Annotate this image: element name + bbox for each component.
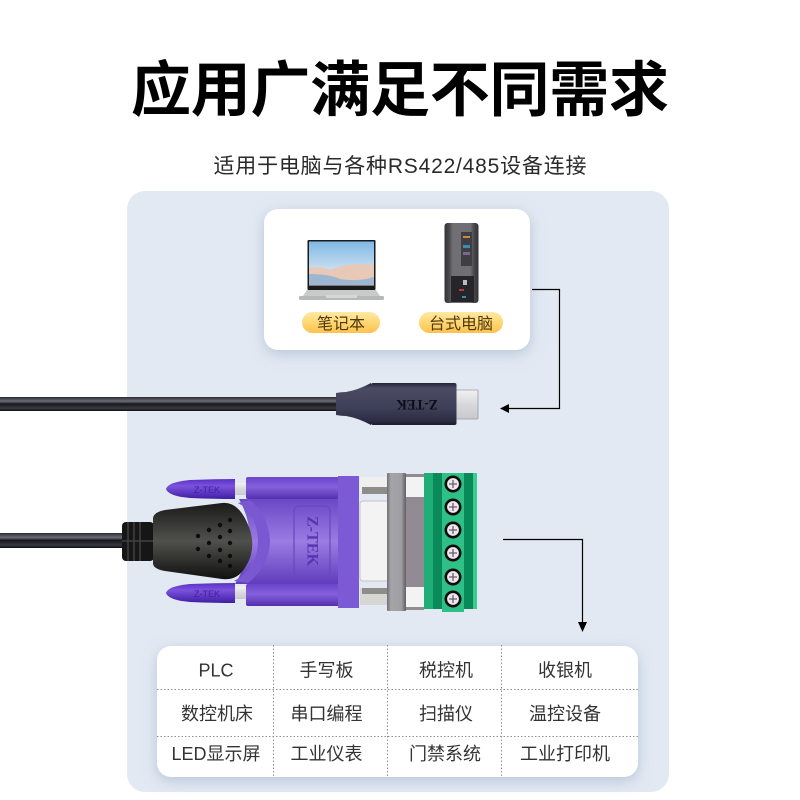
- row 2: 串口编程: [290, 704, 362, 724]
- label pill: laptop: [302, 312, 380, 333]
- arrow: computers to USB-C: [500, 290, 560, 413]
- RS422 cable and DB9 connector: [0, 473, 477, 612]
- black hood: [153, 503, 252, 579]
- row 3: 工业打印机: [520, 744, 610, 764]
- purple shell: [235, 499, 339, 584]
- label pill: desktop: [419, 312, 503, 333]
- green terminal block: [424, 473, 477, 612]
- thumbscrew top: Z-TEK: [194, 485, 220, 495]
- row 1: 收银机: [538, 660, 592, 680]
- subtitle: 适用于电脑与各种RS422/485设备连接: [214, 155, 586, 178]
- grey adapter body: [387, 473, 428, 611]
- thumbscrew top: [166, 479, 246, 499]
- row 2: 数控机床: [181, 704, 253, 724]
- title: 应用广满足不同需求: [131, 57, 669, 124]
- panel: background: [127, 191, 669, 792]
- USB-C cable and connector: [0, 383, 478, 425]
- icon: laptop: [299, 240, 384, 300]
- row 3: 门禁系统: [409, 744, 481, 764]
- label pill: laptop: 笔记本: [317, 315, 365, 333]
- icon: desktop tower: [444, 223, 478, 303]
- arrow: connector to device list: [503, 540, 587, 632]
- metal D-sub shell: [360, 477, 390, 605]
- shell logo: [294, 506, 330, 577]
- row 1: 手写板: [300, 660, 354, 680]
- panel: device table: [157, 645, 638, 777]
- row 3: [171, 744, 610, 764]
- row 2: 温控设备: [529, 704, 601, 724]
- row 2: 扫描仪: [419, 704, 473, 724]
- row 1: PLC: [198, 660, 234, 680]
- shell logo: Z-TEK: [304, 516, 320, 566]
- row 1: 税控机: [419, 660, 473, 680]
- row 2: [181, 704, 601, 724]
- row 3: LED显示屏: [171, 744, 261, 764]
- row 1: [198, 660, 592, 680]
- panel: computers card: [264, 209, 530, 350]
- thumbscrew bottom: Z-TEK: [194, 589, 220, 599]
- label pill: desktop: 台式电脑: [429, 315, 493, 333]
- row 3: 工业仪表: [290, 744, 362, 764]
- strain relief: [122, 522, 154, 561]
- thumbscrew bottom: [166, 583, 246, 603]
- connector logo: Z-TEK: [396, 396, 438, 412]
